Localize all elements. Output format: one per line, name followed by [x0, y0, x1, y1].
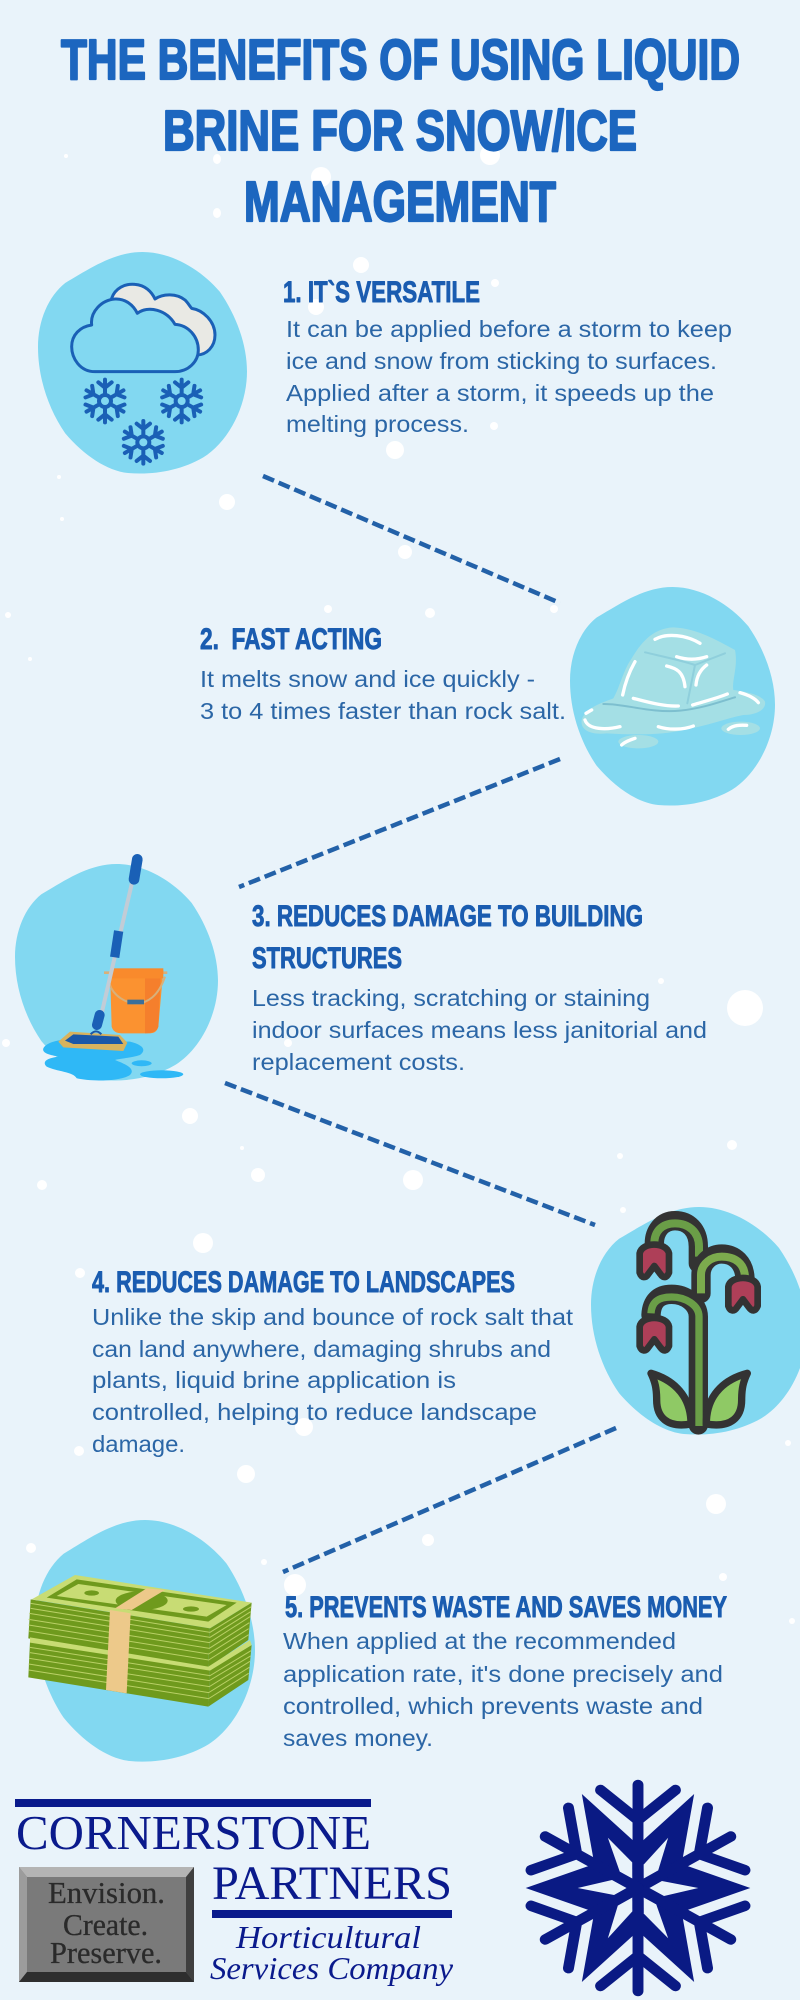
panel: 2 fast acting — [200, 587, 775, 806]
text block: 3: Less tracking, scratching or staining — [252, 985, 650, 1011]
title: BRINE FOR SNOW/ICE — [163, 99, 637, 163]
heading: 3 — [252, 900, 643, 975]
text block: 2: 3 to 4 times faster than rock salt. — [200, 698, 566, 724]
text block: 2 — [200, 666, 566, 724]
text block: 5: saves money. — [283, 1725, 433, 1751]
text block: 4 — [92, 1304, 574, 1457]
heading: 3: 3. REDUCES DAMAGE TO BUILDING — [252, 900, 643, 933]
logo: Cornerstone Partners: Horticultural — [235, 1919, 421, 1955]
heading: 1: 1. IT`S VERSATILE — [283, 276, 480, 309]
text block: 4: can land anywhere, damaging shrubs and — [92, 1336, 551, 1362]
text block: 2: It melts snow and ice quickly - — [200, 666, 535, 692]
heading: 3: STRUCTURES — [252, 942, 402, 975]
panel: 4 reduces damage to landscapes — [92, 1207, 800, 1457]
logo: Cornerstone Partners — [15, 1799, 454, 1986]
stone plaque: Envision. Create. Preserve.: Create. — [63, 1907, 148, 1942]
logo: Cornerstone Partners: CORNERSTONE — [16, 1805, 371, 1860]
text block: 1: It can be applied before a storm to keep — [286, 316, 732, 342]
text block: 4: damage. — [92, 1431, 185, 1457]
text block: 3: replacement costs. — [252, 1049, 465, 1075]
text block: 5 — [283, 1628, 723, 1751]
text block: 1: melting process. — [286, 411, 469, 437]
icon: melting ice — [570, 587, 775, 806]
arrow: dashed connector 3 to 4 — [225, 1083, 595, 1225]
panel: 1 versatile — [38, 252, 732, 474]
title: MANAGEMENT — [244, 170, 556, 234]
text block: 1: ice and snow from sticking to surfaces. — [286, 348, 717, 374]
text block: 1 — [286, 316, 732, 437]
logo: Cornerstone Partners: PARTNERS — [212, 1857, 452, 1910]
text block: 4: Unlike the skip and bounce of rock salt that — [92, 1304, 574, 1330]
text block: 5: application rate, it's done precisely and — [283, 1661, 723, 1687]
text block: 4: controlled, helping to reduce landscape — [92, 1399, 537, 1425]
stone plaque: Envision. Create. Preserve.: Envision. — [48, 1875, 165, 1910]
stone plaque: Envision. Create. Preserve.: Preserve. — [50, 1935, 162, 1970]
text block: 1: Applied after a storm, it speeds up the — [286, 380, 714, 406]
title — [61, 28, 740, 234]
icon: mop and bucket — [15, 859, 218, 1081]
text block: 5: When applied at the recommended — [283, 1628, 676, 1654]
text block: 5: controlled, which prevents waste and — [283, 1693, 703, 1719]
text block: 3: indoor surfaces means less janitorial and — [252, 1017, 707, 1043]
panel: 3 reduces damage to building structures — [15, 859, 707, 1081]
logo: Cornerstone Partners: Services Company — [210, 1950, 454, 1986]
icon: stack of money — [28, 1520, 255, 1762]
icon: snow cloud — [38, 252, 247, 474]
text block: 3 — [252, 985, 707, 1075]
arrow: dashed connector 1 to 2 — [263, 476, 560, 603]
stone plaque: Envision. Create. Preserve. — [19, 1867, 194, 1982]
icon: flowering plant — [591, 1207, 800, 1435]
panel: 5 prevents waste and saves money — [28, 1520, 727, 1762]
heading: 2: 2. FAST ACTING — [200, 623, 382, 656]
text block: 4: plants, liquid brine application is — [92, 1367, 456, 1393]
arrow: dashed connector 2 to 3 — [239, 759, 560, 887]
icon: large navy snowflake — [526, 1785, 750, 1991]
heading: 4: 4. REDUCES DAMAGE TO LANDSCAPES — [92, 1266, 515, 1299]
arrow: dashed connector 4 to 5 — [283, 1428, 616, 1572]
